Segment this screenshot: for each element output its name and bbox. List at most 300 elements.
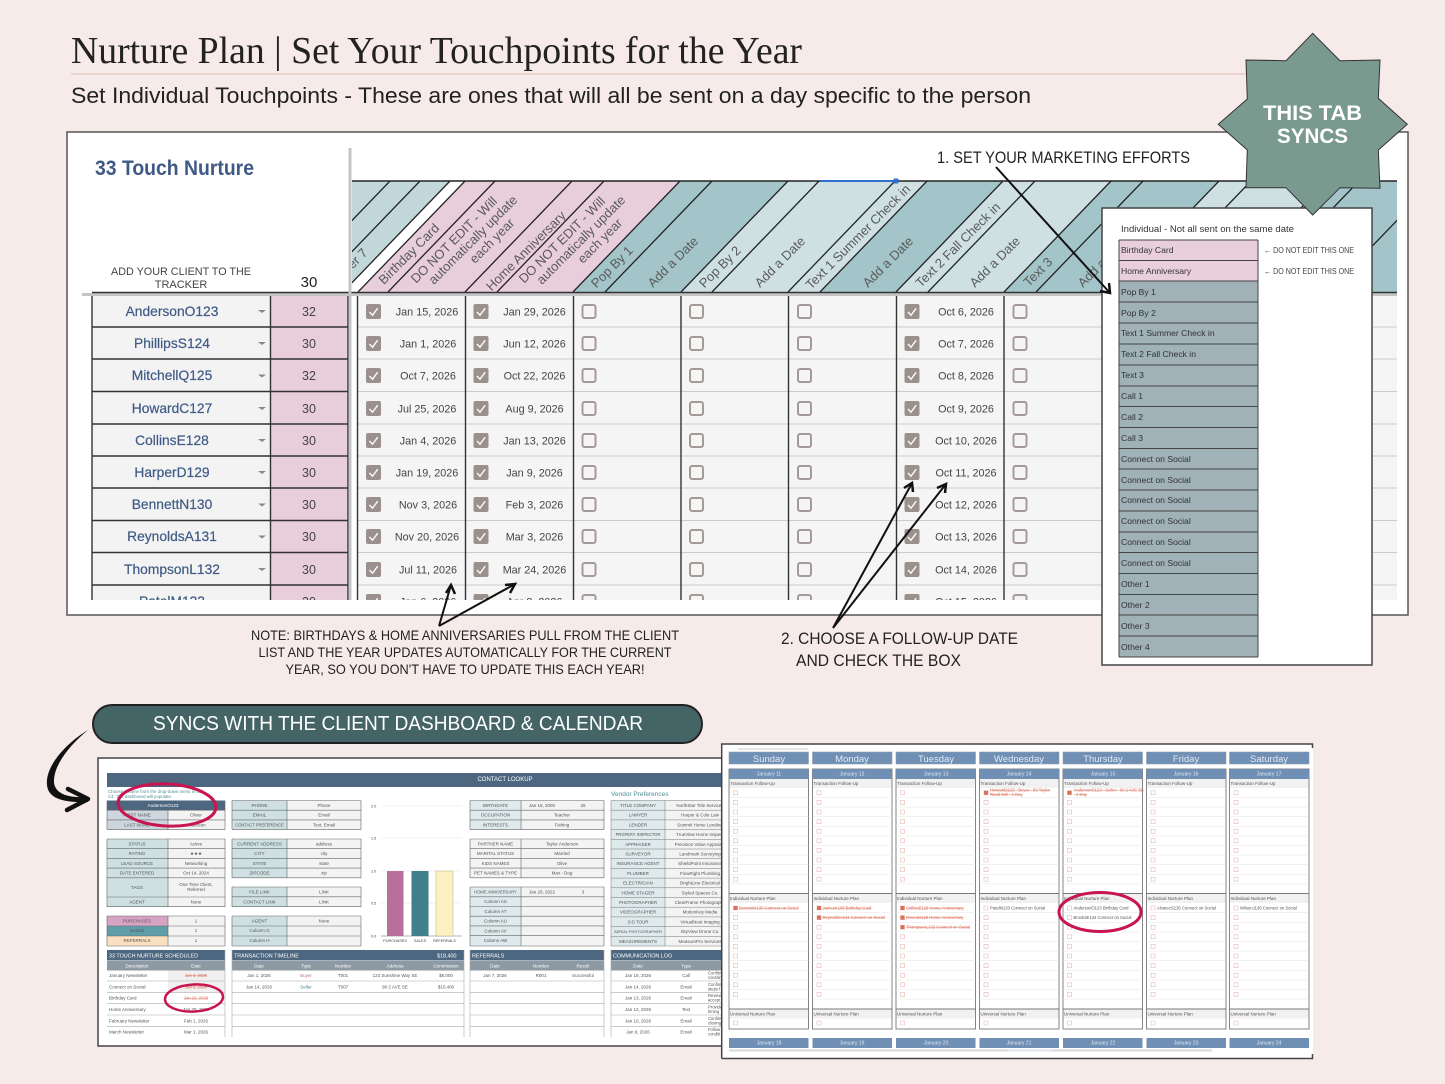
week dates: January 19	[840, 1040, 865, 1046]
table: 33 touch nurture scheduled: Connect on Social	[109, 984, 146, 989]
touch counts: 32	[302, 305, 316, 319]
table: 33 touch nurture scheduled: Birthday Card	[109, 996, 137, 1001]
section labels: Universal Nurture Plan	[980, 1012, 1026, 1016]
panel: individual touchpoint list: Connect on Social	[1121, 454, 1191, 464]
table: communication log: Email	[680, 1030, 692, 1035]
personal details block: Jan 15, 2000	[529, 803, 556, 808]
slanted column headers: DO NOT EDIT - Will	[516, 193, 608, 286]
status block: Oct 14, 2024	[183, 871, 209, 876]
personal details block: Olive	[557, 861, 568, 866]
contact details block: AGENT	[252, 918, 267, 924]
contact details block: LINK	[319, 900, 329, 904]
vendor preferences: 3-D TOUR	[627, 919, 649, 924]
table: 33 touch nurture scheduled: 33 TOUCH NURTURE SCHEDULED	[109, 954, 198, 960]
personal details block: 26	[580, 803, 586, 808]
instruction	[108, 789, 203, 799]
personal details block: Column AS	[484, 899, 507, 904]
purchases sales referrals block: SALES	[130, 928, 144, 933]
week dates: January 23	[1174, 1040, 1199, 1046]
table: transaction timeline: Date	[254, 964, 264, 968]
client names: PhillipsS124	[134, 336, 210, 351]
slanted column headers: each year	[466, 215, 518, 266]
weekday headers: Monday	[835, 754, 869, 765]
contact details block: zip	[321, 871, 327, 876]
table: 33 touch nurture scheduled: February Newsletter	[109, 1018, 150, 1023]
section labels: Transaction Follow-Up	[980, 781, 1026, 786]
panel: contact lookup dashboard	[98, 758, 738, 1046]
vendor preferences: SkyView Drone Co.	[681, 929, 719, 934]
week dates: January 21	[1007, 1040, 1032, 1046]
calendar tasks: WilsonJ136 Connect on Social	[1240, 906, 1297, 910]
birthday dates: Jan 6, 2026	[400, 596, 456, 608]
weekday headers: Sunday	[753, 754, 785, 765]
step 1 label: 1. SET YOUR MARKETING EFFORTS	[937, 149, 1190, 167]
calendar tasks: ThompsonL132 Connect on Social	[906, 925, 970, 930]
panel: individual touchpoint list: Text 3	[1121, 370, 1144, 380]
text 2 follow-up dates: Oct 6, 2026	[938, 306, 994, 318]
table: 33 touch nurture scheduled: Home Anniversary	[109, 1007, 147, 1012]
contact details block: Column H	[249, 938, 270, 943]
touch counts: 30	[302, 466, 316, 480]
client names: AndersonO123	[126, 304, 219, 319]
panel: individual touchpoint list: Other 3	[1121, 621, 1150, 631]
purchases sales referrals block: 1	[195, 918, 198, 924]
table: communication log: Jan 12, 2026	[625, 1007, 652, 1012]
table: communication log: Provide	[708, 1004, 723, 1010]
slanted column headers: Add a Date	[1075, 234, 1131, 290]
bar chart: 0.0	[371, 934, 376, 938]
table: communication log: Confirm	[708, 970, 723, 976]
panel: individual touchpoint list: Other 4	[1121, 642, 1150, 652]
purchases sales referrals block: PURCHASES	[123, 918, 151, 924]
calendar tasks: ReynoldsA131 Connect on Social	[822, 915, 885, 920]
week dates: January 16	[1174, 772, 1199, 778]
touch counts: 30	[302, 498, 316, 512]
badge: this tab syncs: THIS TAB	[1263, 102, 1362, 125]
bar chart: 2.0	[371, 804, 376, 808]
birthday dates: Jul 11, 2026	[399, 564, 457, 576]
table: transaction timeline: T001	[338, 973, 349, 978]
panel: individual touchpoint list	[1102, 208, 1372, 665]
bar chart: PURCHASES	[383, 939, 407, 943]
table: 33 touch nurture scheduled: Jan 6, 2026	[185, 984, 208, 989]
step 2 label: AND CHECK THE BOX	[796, 652, 961, 670]
client names: ReynoldsA131	[127, 529, 217, 544]
vendor preferences: Precision Value Appraisal	[675, 842, 725, 847]
client names: CollinsE128	[135, 433, 209, 448]
table: communication log: Reviewe	[708, 993, 725, 998]
bar chart: SALES	[414, 939, 427, 943]
contact name block: Oliver	[190, 813, 202, 818]
text 2 follow-up dates: Oct 12, 2026	[935, 500, 997, 512]
note text	[251, 627, 679, 677]
vendor preferences: SURVEYOR	[625, 852, 651, 856]
home anniversary dates: Apr 8, 2026	[507, 596, 562, 608]
contact name block	[107, 800, 225, 830]
table: transaction timeline: Jan 1, 2026	[247, 973, 271, 978]
instruction: Choose a name from the drop-down menu in cell	[108, 789, 203, 794]
contact name block: FIRST NAME	[123, 813, 151, 818]
client names: BennettN130	[132, 497, 213, 512]
personal details block: 3	[582, 890, 585, 894]
table: communication log: Jan 14, 2026	[625, 984, 652, 989]
birthday dates: Jan 1, 2026	[400, 338, 456, 350]
contact details block: Text, Email	[313, 822, 335, 827]
status block: Referred	[187, 887, 205, 892]
week dates: January 12	[840, 772, 865, 778]
arrow: curly to dashboard	[47, 730, 88, 810]
weekday headers: Saturday	[1250, 754, 1288, 765]
calendar tasks: - 1 Day	[1074, 792, 1088, 797]
calendar tasks	[739, 788, 1297, 930]
panel: individual touchpoint list: Text 2 Fall Check in	[1121, 349, 1196, 359]
section labels: Individual Nurture Plan	[980, 896, 1027, 901]
slanted column headers: Pop By 2	[696, 243, 744, 291]
personal details block: Teacher	[554, 813, 571, 818]
personal details block: HOME ANNIVERSARY	[474, 890, 517, 894]
week dates: January 24	[1257, 1040, 1282, 1046]
section labels: Universal Nurture Plan	[897, 1012, 943, 1016]
subtitle: Set Individual Touchpoints - These are ones that will all be sent on a day specific to the person	[71, 83, 1031, 108]
contact details block: state	[319, 861, 329, 866]
table: referrals: R001	[536, 973, 547, 978]
calendar tasks: BrooksE134 Connect on Social	[1074, 915, 1132, 920]
contact details block: Phone	[317, 803, 331, 808]
contact name block: Anderson	[186, 822, 206, 827]
table: communication log: Jan 10, 2026	[625, 1018, 652, 1023]
birthday dates: Nov 20, 2026	[395, 532, 459, 544]
personal details block: PARTNER NAME	[478, 842, 513, 846]
section labels: Individual Nurture Plan	[814, 896, 860, 901]
panel: individual touchpoint list: Connect on Social	[1121, 558, 1191, 568]
contact details block: city	[321, 851, 328, 856]
table: transaction timeline	[232, 950, 464, 1037]
slanted column headers: Home Anniversary	[483, 208, 569, 294]
vendor preferences: ShieldPoint Insurance	[678, 861, 722, 866]
section labels: Universal Nurture Plan	[1148, 1012, 1193, 1016]
section labels: Individual Nurture Plan	[897, 896, 943, 901]
section labels: Transaction Follow-Up	[814, 781, 859, 786]
table: 33 touch nurture scheduled: Mar 1, 2026	[184, 1030, 209, 1035]
table: communication log: Confirm	[708, 982, 723, 987]
calendar tasks: HowardQ125 - Buyer - 89 Taylor	[990, 788, 1051, 792]
purchases sales referrals block: REFERRALS	[123, 938, 151, 943]
table: 33 touch nurture scheduled: March Newsletter	[109, 1030, 145, 1035]
touch counts: 30	[302, 563, 316, 577]
weekday headers: Tuesday	[918, 754, 954, 765]
panel: individual touchpoint list: Call 2	[1121, 412, 1143, 422]
weekday headers: Wednesday	[994, 754, 1044, 765]
table: 33 touch nurture scheduled: Description	[126, 964, 149, 968]
weekday headers	[753, 754, 1288, 765]
table: 33 touch nurture scheduled: Feb 1, 2026	[184, 1018, 208, 1023]
vendor preferences: APPRAISER	[625, 842, 652, 847]
status block: AGENT	[129, 900, 145, 904]
table: communication log: Call	[682, 973, 690, 978]
table: referrals: Jan 7, 2026	[483, 973, 507, 978]
table: communication log: Confirm	[708, 1016, 723, 1021]
week dates: January 18	[757, 1040, 782, 1046]
table: communication log: Follow	[708, 1027, 721, 1032]
vendor preferences: LENDER	[629, 822, 648, 827]
section labels: Universal Nurture Plan	[730, 1012, 776, 1016]
vendor preferences: PHOTOGRAPHER	[619, 900, 658, 905]
table: communication log: Email	[680, 996, 692, 1001]
vendor preferences: MotionKey Media	[683, 910, 718, 915]
section labels: Transaction Follow-Up	[730, 781, 775, 786]
highlight circle: birthday date	[164, 983, 224, 1013]
touch counts: 30	[302, 595, 316, 609]
contact details block: None	[319, 918, 330, 924]
birthday dates: Jan 15, 2026	[396, 306, 458, 318]
slanted column headers: Add a Date	[645, 234, 701, 290]
panel: calendar	[721, 744, 1313, 1059]
purchases sales referrals block	[107, 916, 225, 946]
table: communication log	[611, 950, 727, 1037]
table: transaction timeline: Buyer	[300, 973, 312, 978]
text 2 follow-up dates: Oct 13, 2026	[935, 532, 997, 544]
table: referrals: REFERRALS	[472, 954, 505, 960]
home anniversary dates: Oct 22, 2026	[504, 370, 565, 382]
table: transaction timeline: 123 Sunshine Way SE	[373, 973, 417, 978]
calendar tasks: RiveraD125 Home Anniversary	[906, 915, 964, 920]
step 2 label	[781, 630, 1018, 670]
table: communication log: Email	[680, 1018, 692, 1023]
section labels: Universal Nurture Plan	[1064, 1012, 1110, 1016]
calendar tasks: AndersonO123 Birthday Card	[1074, 906, 1129, 910]
home anniversary dates: Feb 3, 2026	[506, 500, 563, 512]
week dates: January 22	[1091, 1040, 1116, 1046]
vendor preferences: MEASUREMENTS	[619, 939, 657, 944]
table: 33 touch nurture scheduled: Date	[191, 964, 201, 968]
section labels: Transaction Follow-Up	[1230, 781, 1276, 786]
bar chart: 1.5	[371, 836, 376, 840]
vendor preferences: MeasurePro Services	[678, 939, 722, 944]
home anniversary dates: Aug 9, 2026	[505, 404, 564, 416]
vendor preferences: VirtualNest Imaging	[680, 919, 720, 924]
text 2 follow-up dates: Oct 8, 2026	[938, 370, 994, 382]
table: communication log: closing	[708, 1020, 722, 1026]
calendar tasks: JamesK108 Birthday Card	[822, 906, 872, 910]
section labels: Individual Nurture Plan	[1064, 896, 1110, 901]
vendor preferences: INSURANCE AGENT	[616, 861, 660, 866]
personal details block: Taylor Anderson	[546, 842, 579, 846]
table: communication log: steps f	[708, 986, 721, 992]
contact details block: PHONE	[251, 803, 268, 808]
text 2 follow-up dates: Oct 14, 2026	[935, 564, 997, 576]
home anniversary dates: Mar 3, 2026	[506, 532, 563, 544]
label: add your client: TRACKER	[155, 279, 207, 291]
personal details block: PET NAMES & TYPE	[474, 871, 517, 876]
table: communication log: COMMUNICATION LOG	[613, 954, 672, 960]
highlight circle: thursday tasks	[1059, 892, 1141, 932]
table: transaction timeline: Jan 14, 2026	[246, 984, 273, 989]
arrow: marketing efforts to list	[996, 167, 1110, 293]
panel: individual touchpoint list: Other 2	[1121, 600, 1150, 610]
table: transaction timeline: $10,400	[438, 984, 455, 989]
vendor preferences: Vendor Preferences	[611, 791, 669, 798]
vendor preferences: NorthStar Title Services	[676, 803, 724, 808]
text 2 follow-up dates	[935, 306, 997, 608]
checkboxes	[366, 304, 1026, 609]
birthday dates: Oct 7, 2026	[400, 370, 456, 382]
table: communication log: Jan 9, 2026	[626, 1030, 650, 1035]
header bar: CONTACT LOOKUP	[477, 777, 533, 783]
table: 33 touch nurture scheduled: Jan 29, 2026	[183, 1007, 210, 1012]
personal details block: INTERESTS	[483, 822, 508, 827]
slanted column headers: Text 2 Fall Check in	[912, 199, 1003, 290]
home anniversary dates: Jan 13, 2026	[503, 436, 566, 448]
heading: 33 Touch Nurture: 33 Touch Nurture	[95, 157, 254, 180]
personal details block: Max - Dog	[552, 871, 573, 876]
table: referrals: Result	[576, 964, 590, 968]
table: transaction timeline: $8,000	[439, 973, 453, 978]
note text: NOTE: BIRTHDAYS & HOME ANNIVERSARIES PULL FROM THE CLIENT	[251, 627, 679, 643]
table: transaction timeline: Type	[301, 964, 311, 968]
table: referrals: Successful	[572, 973, 594, 978]
contact details block: EMAIL	[253, 813, 267, 818]
vendor preferences: LAWYER	[629, 813, 648, 818]
section labels: Transaction Follow-Up	[1064, 781, 1109, 786]
panel: individual touchpoint list: ← DO NOT EDIT THIS ONE	[1264, 267, 1354, 276]
label: add your client	[111, 266, 251, 291]
badge: this tab syncs: SYNCS	[1277, 125, 1348, 148]
personal details block: OCCUPATION	[481, 813, 510, 818]
vendor preferences: AERIAL PHOTOGRAPHER	[614, 929, 662, 934]
contact details block: CONTACT PREFERENCE	[235, 822, 284, 827]
contact name block: LAST NAME	[124, 822, 150, 827]
vendor preferences: HOME STAGER	[622, 890, 655, 895]
panel: individual touchpoint list: Other 1	[1121, 579, 1150, 589]
contact details block: Email	[318, 813, 330, 818]
text 2 follow-up dates: Oct 7, 2026	[938, 338, 994, 350]
text 2 follow-up dates: Oct 11, 2026	[935, 468, 997, 480]
text 2 follow-up dates: Oct 10, 2026	[935, 436, 997, 448]
vendor preferences: BrightLine Electrical	[680, 881, 720, 886]
touch counts: 30	[302, 434, 316, 448]
slanted column headers: each year	[574, 215, 626, 266]
table: referrals: Number	[533, 964, 550, 968]
table: communication log: Email	[680, 984, 692, 989]
table: transaction timeline: TRANSACTION TIMELINE	[234, 954, 299, 960]
contact name block: AndersonO123	[148, 803, 179, 808]
panel: individual touchpoint list: Call 3	[1121, 433, 1143, 443]
vendor preferences: ClearFrame Photography	[675, 900, 726, 905]
table: 33 touch nurture scheduled	[107, 950, 225, 1037]
table: 33 touch nurture scheduled: January Newsletter	[109, 973, 148, 978]
banner: syncs with dashboard and calendar: SYNCS WITH THE CLIENT DASHBOARD & CALENDAR	[153, 713, 643, 735]
contact details block: CITY	[254, 851, 265, 856]
slanted column headers: Text 3	[1020, 254, 1055, 289]
text 2 follow-up dates: Oct 15, 2026	[935, 596, 997, 608]
section labels: Universal Nurture Plan	[814, 1012, 859, 1016]
contact details block: Column G	[249, 928, 270, 933]
purchases sales referrals block: 1	[195, 938, 198, 943]
week dates: January 14	[1007, 772, 1032, 778]
client names: ThompsonL132	[124, 562, 220, 577]
table: referrals: Date	[490, 964, 500, 968]
bar chart: REFERRALS	[433, 939, 456, 943]
note text: LIST AND THE YEAR UPDATES AUTOMATICALLY FOR THE CURRENT	[258, 644, 672, 660]
panel: individual touchpoint list: Connect on Social	[1121, 495, 1191, 505]
week dates: January 17	[1257, 772, 1282, 778]
checked boxes	[734, 791, 1072, 929]
slanted column headers: Birthday Card	[375, 220, 442, 287]
panel: individual touchpoint list: ← DO NOT EDIT THIS ONE	[1264, 246, 1354, 255]
home anniversary dates: Jan 9, 2026	[506, 468, 563, 480]
step 2 label: 2. CHOOSE A FOLLOW-UP DATE	[781, 630, 1018, 648]
contact details block: CURRENT ADDRESS	[237, 842, 282, 846]
vendor preferences: Styled Spaces Co.	[681, 890, 719, 895]
slanted column headers: DO NOT EDIT - Will	[408, 193, 500, 286]
section labels: Individual Nurture Plan	[1230, 896, 1277, 901]
client table with dates and checkboxes	[92, 294, 1397, 609]
slanted column headers: Add a Date	[860, 234, 916, 290]
bar chart: 0.5	[371, 902, 376, 906]
personal details block: Fishing	[555, 822, 570, 827]
status block: TAGS	[131, 885, 143, 890]
contact details block: CONTACT LINK	[243, 900, 276, 904]
panel: individual touchpoint list: Home Anniversary	[1121, 266, 1192, 276]
table: transaction timeline: Number	[335, 964, 352, 968]
text 2 follow-up dates: Oct 9, 2026	[938, 404, 994, 416]
section labels: Transaction Follow-Up	[1148, 781, 1193, 786]
section labels: Individual Nurture Plan	[1148, 896, 1194, 901]
status block: Active	[190, 842, 203, 846]
calendar tasks: BennettN130 Connect on Social	[739, 906, 799, 910]
home anniversary dates: Jan 29, 2026	[503, 306, 566, 318]
status block	[107, 839, 225, 907]
week dates	[757, 772, 1282, 1046]
table: transaction timeline: Commission	[433, 964, 459, 968]
personal details block: MARITAL STATUS	[477, 851, 514, 856]
personal details block: KIDS NAMES	[482, 861, 509, 866]
vendor preferences: ELECTRICIAN	[623, 881, 653, 886]
calendar tasks: AlvarezS135 Connect on Social	[1157, 906, 1216, 910]
section labels: Transaction Follow-Up	[897, 781, 942, 786]
panel: individual touchpoint list: Pop By 2	[1121, 308, 1156, 318]
title: Nurture Plan | Set Your Touchpoints for the Year	[71, 30, 802, 72]
slanted column headers: Add a Date	[967, 234, 1023, 290]
table: communication log: conditi	[708, 1032, 720, 1036]
vendor preferences: Landmark Surveying	[679, 852, 721, 856]
arrows: note to date columns	[439, 584, 515, 626]
personal details block: Column AV	[484, 928, 507, 933]
table: transaction timeline: 90 2 AVE SE	[382, 984, 408, 989]
status block: LEAD SOURCE	[121, 861, 153, 866]
client names: HowardC127	[132, 401, 212, 416]
status block: None	[191, 900, 202, 904]
contact details block: address	[316, 842, 333, 846]
slanted column headers: Add a Date	[752, 234, 808, 290]
personal details block: Column AU	[484, 919, 507, 924]
bar chart	[371, 804, 462, 943]
table: communication log: Text	[682, 1007, 691, 1012]
personal details block: Column AW	[484, 938, 508, 943]
table: communication log: Jan 13, 2026	[625, 996, 652, 1001]
vendor preferences: TrueView Home Inspect	[676, 832, 725, 837]
table: communication log: Jan 16, 2026	[625, 973, 652, 978]
table: transaction timeline: T007	[338, 984, 349, 989]
table: communication log: timing	[708, 1009, 720, 1014]
calendar columns	[729, 752, 1309, 1048]
weekday headers: Thursday	[1083, 754, 1123, 765]
label: add your client: ADD YOUR CLIENT TO THE	[111, 266, 251, 278]
panel: individual touchpoint list: Call 1	[1121, 391, 1143, 401]
weekday headers: Friday	[1173, 754, 1199, 765]
contact details block: LINK	[319, 890, 329, 894]
home anniversary dates: Mar 24, 2026	[503, 564, 566, 576]
